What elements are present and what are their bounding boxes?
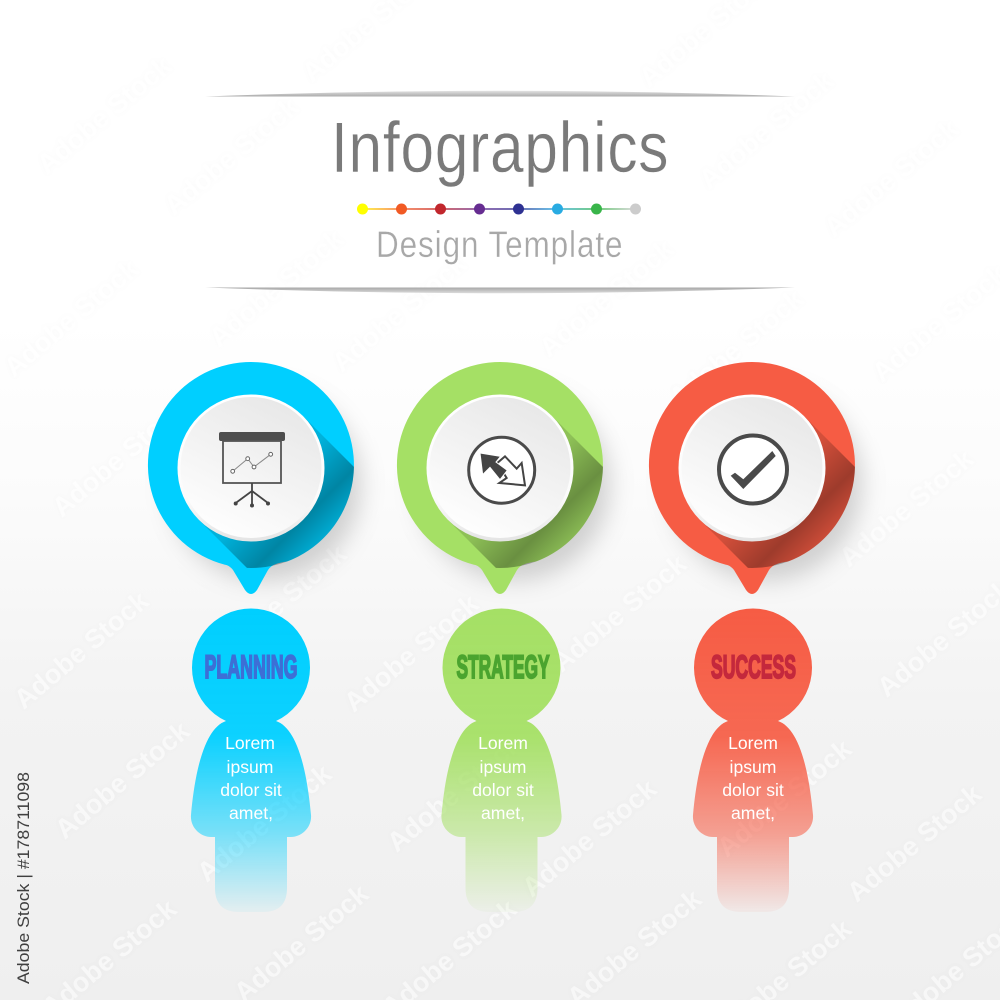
white disc	[426, 394, 574, 542]
pin: planning	[148, 362, 370, 594]
watermark pattern: Adobe Stock	[206, 538, 353, 668]
person: success	[693, 609, 813, 912]
long shadow	[700, 416, 855, 568]
watermark pattern: Adobe Stock	[31, 50, 178, 180]
watermark pattern: Adobe Stock	[663, 283, 810, 413]
heading: SUCCESS	[711, 649, 796, 685]
watermark pattern: Adobe Stock	[711, 733, 858, 863]
person: planning	[191, 609, 311, 912]
body text: dolor sit	[722, 780, 784, 800]
watermark pattern: Adobe Stock	[533, 233, 680, 363]
white disc	[178, 394, 324, 542]
body text: amet,	[481, 803, 525, 823]
icon: presentation board	[219, 432, 285, 508]
watermark pattern: Adobe Stock	[203, 223, 350, 353]
pin: success	[648, 362, 871, 594]
watermark pattern: Adobe Stock	[46, 393, 193, 523]
body text	[472, 733, 534, 823]
body text: ipsum	[227, 757, 273, 777]
watermark pattern: Adobe Stock	[158, 91, 305, 221]
heading: PLANNING	[205, 649, 297, 685]
soft outer shadow	[670, 388, 862, 580]
icon: two opposing arrows	[469, 437, 535, 503]
body text	[220, 733, 282, 823]
long shadow	[199, 416, 354, 568]
body text: Lorem	[728, 733, 778, 753]
pin: strategy	[396, 362, 619, 594]
soft outer shadow	[169, 388, 361, 580]
stock id caption: Adobe Stock | #178711098	[14, 772, 33, 984]
body text: Lorem	[478, 733, 528, 753]
body text	[722, 733, 784, 823]
title: Infographics	[331, 107, 668, 187]
pin shape	[148, 362, 354, 594]
header panel	[205, 91, 795, 293]
body text: amet,	[731, 803, 775, 823]
pin shape	[649, 362, 855, 594]
long shadow	[448, 416, 603, 568]
watermark pattern: Adobe Stock	[693, 65, 840, 195]
body text: ipsum	[730, 757, 776, 777]
soft outer shadow	[418, 388, 610, 580]
heading: STRATEGY	[457, 649, 549, 685]
top shadow line	[205, 91, 795, 96]
watermark pattern: Adobe Stock	[833, 443, 980, 573]
bottom shadow line	[205, 288, 795, 293]
person silhouette	[441, 609, 562, 912]
person: strategy	[441, 609, 562, 912]
watermark pattern: Adobe Stock	[818, 113, 965, 243]
person silhouette	[191, 609, 311, 912]
watermark pattern: Adobe Stock	[546, 548, 693, 678]
watermark pattern: Adobe Stock	[381, 728, 528, 858]
body text: dolor sit	[472, 780, 534, 800]
watermark pattern: Adobe Stock	[338, 588, 485, 718]
watermark pattern: Adobe Stock	[8, 585, 155, 715]
watermark pattern: Adobe Stock	[516, 773, 663, 903]
watermark pattern: Adobe Stock	[0, 253, 145, 383]
white disc	[678, 394, 826, 542]
watermark pattern: Adobe Stock	[49, 715, 196, 845]
pin shape	[397, 362, 603, 594]
icon: check mark	[719, 436, 787, 504]
watermark pattern: Adobe Stock	[841, 778, 988, 908]
body text: dolor sit	[220, 780, 282, 800]
subtitle: Design Template	[376, 225, 623, 266]
watermark pattern: Adobe Stock	[326, 248, 473, 378]
person silhouette	[693, 609, 813, 912]
colored dot timeline	[357, 204, 641, 214]
watermark pattern: Adobe Stock	[191, 758, 338, 888]
body text: Lorem	[225, 733, 275, 753]
body text: ipsum	[480, 757, 526, 777]
body text: amet,	[229, 803, 273, 823]
